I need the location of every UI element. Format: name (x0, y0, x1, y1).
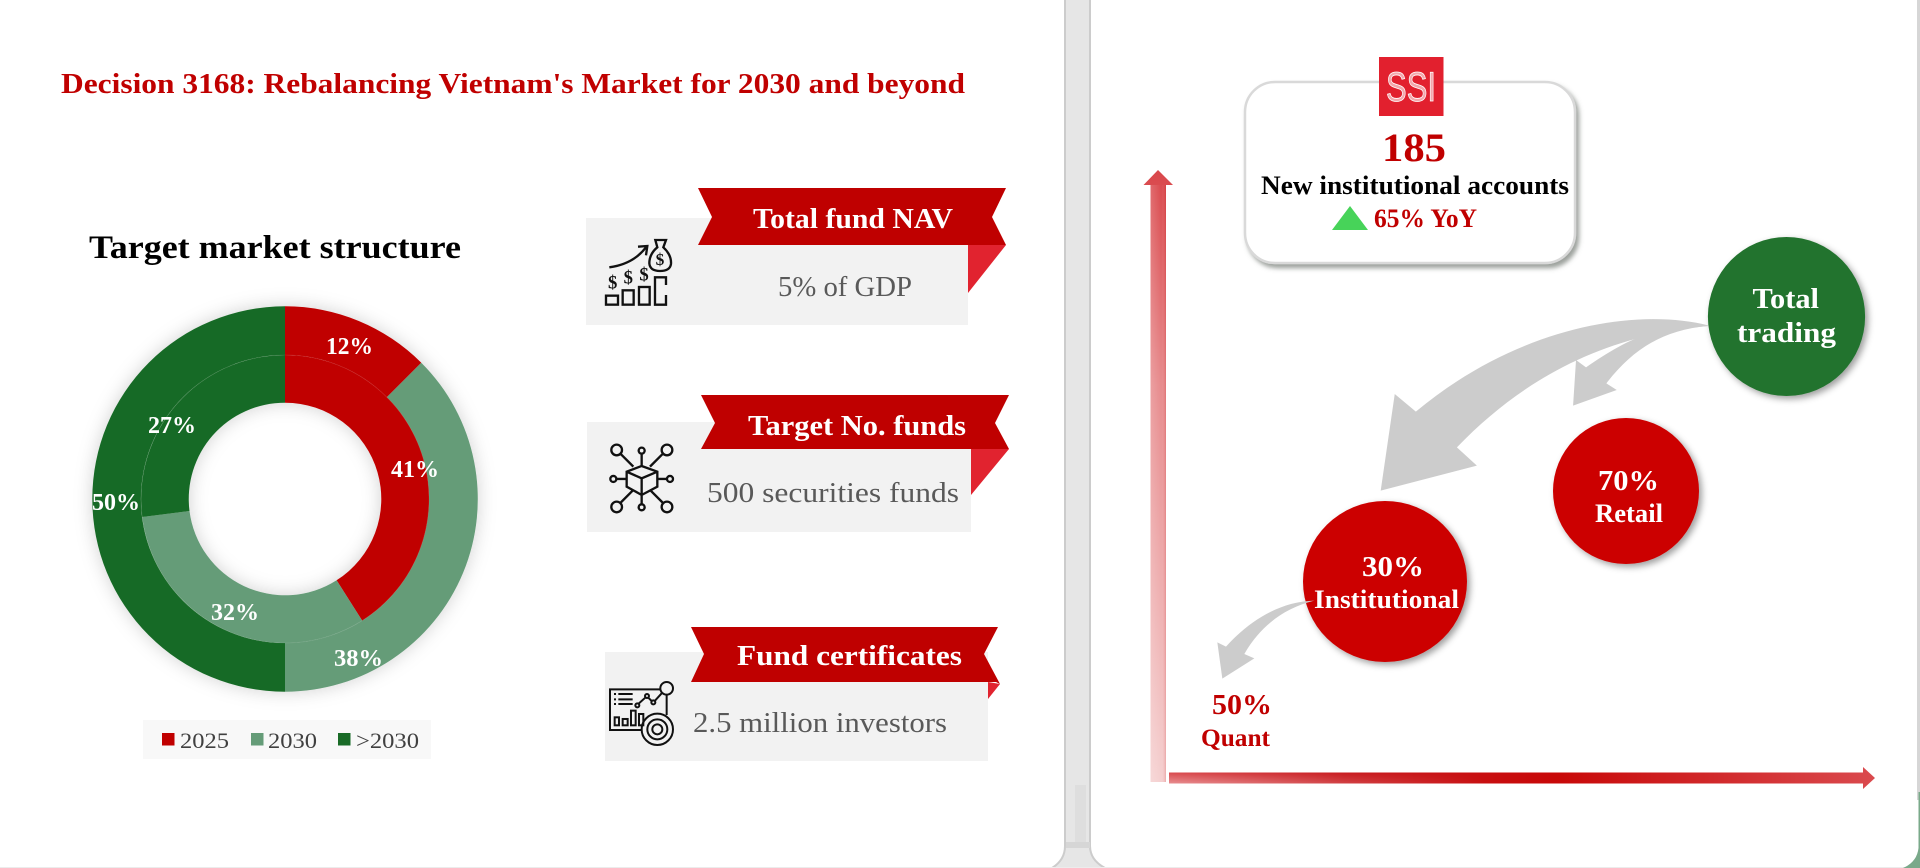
arrow: total to retail (1573, 326, 1708, 406)
data labels: 50% (92, 490, 140, 516)
data labels: 41% (391, 457, 439, 483)
arrow: institutional to quant (1217, 601, 1314, 679)
ring separator (141, 355, 429, 643)
icon: money growth: $ (639, 265, 649, 286)
account count: 185 (1382, 125, 1446, 170)
growth value: 65% YoY (1374, 204, 1477, 233)
value: 2.5 million investors (693, 707, 947, 739)
data labels: 27% (148, 413, 196, 439)
ribbon label: Fund certificates (737, 640, 962, 672)
legend: 2025 (180, 728, 229, 753)
circle: total trading: Total (1752, 283, 1819, 315)
ribbon label: Total fund NAV (753, 203, 953, 235)
icon: money growth (606, 240, 671, 305)
arrow: total to institutional (1381, 319, 1708, 491)
circle: institutional (1217, 501, 1467, 679)
icon: money growth: $ (656, 250, 665, 269)
icon: analytics dashboard (610, 682, 673, 745)
legend: 2030 (268, 728, 317, 753)
left panel (61, 69, 1009, 761)
donut chart (92, 306, 478, 759)
ribbon fold (988, 682, 1000, 699)
circle: retail: Retail (1595, 499, 1663, 528)
horizontal axis arrow (1169, 767, 1875, 789)
icon: up triangle (1332, 206, 1368, 230)
circle: total trading: trading (1737, 317, 1837, 349)
icon: money growth: $ (624, 267, 633, 288)
account label: New institutional accounts (1261, 171, 1569, 200)
data labels: 38% (334, 646, 383, 672)
right panel (1144, 57, 1875, 789)
quant label: 50% (1212, 690, 1272, 721)
circle: total trading (1708, 237, 1865, 396)
SSI logo: SSI (1386, 63, 1436, 110)
ribbon fold (971, 449, 1009, 495)
donut rings (92, 306, 478, 692)
legend: >2030 (356, 728, 419, 753)
card: target number of funds (587, 395, 1009, 532)
callout card (1245, 57, 1575, 263)
ribbon label: Target No. funds (748, 410, 966, 442)
ribbon fold (968, 245, 1006, 293)
circle: retail: 70% (1598, 466, 1659, 497)
value: 500 securities funds (707, 477, 959, 509)
icon: network cube (610, 445, 673, 512)
page divider between panels (1052, 0, 1105, 868)
quant label (1201, 690, 1272, 752)
ribbon (698, 188, 1006, 245)
circle: institutional: 30% (1362, 552, 1424, 583)
data labels: 32% (211, 600, 259, 626)
SSI logo (1379, 57, 1444, 116)
icon: money growth: $ (608, 272, 617, 293)
ribbon (691, 627, 1000, 684)
value: 5% of GDP (778, 271, 912, 303)
circle: retail (1553, 418, 1699, 564)
ribbon (701, 395, 1009, 449)
data labels (92, 334, 439, 672)
card: fund certificates (605, 627, 1000, 761)
card: total fund NAV (586, 188, 1006, 325)
vertical axis arrow (1144, 170, 1173, 782)
circle: institutional: Institutional (1314, 585, 1459, 614)
quant label: Quant (1201, 725, 1271, 752)
chart heading: Target market structure (89, 230, 461, 266)
legend (143, 720, 431, 759)
title: Decision 3168: Rebalancing Vietnam's Market for 2030 and beyond (61, 69, 965, 100)
data labels: 12% (326, 334, 373, 360)
